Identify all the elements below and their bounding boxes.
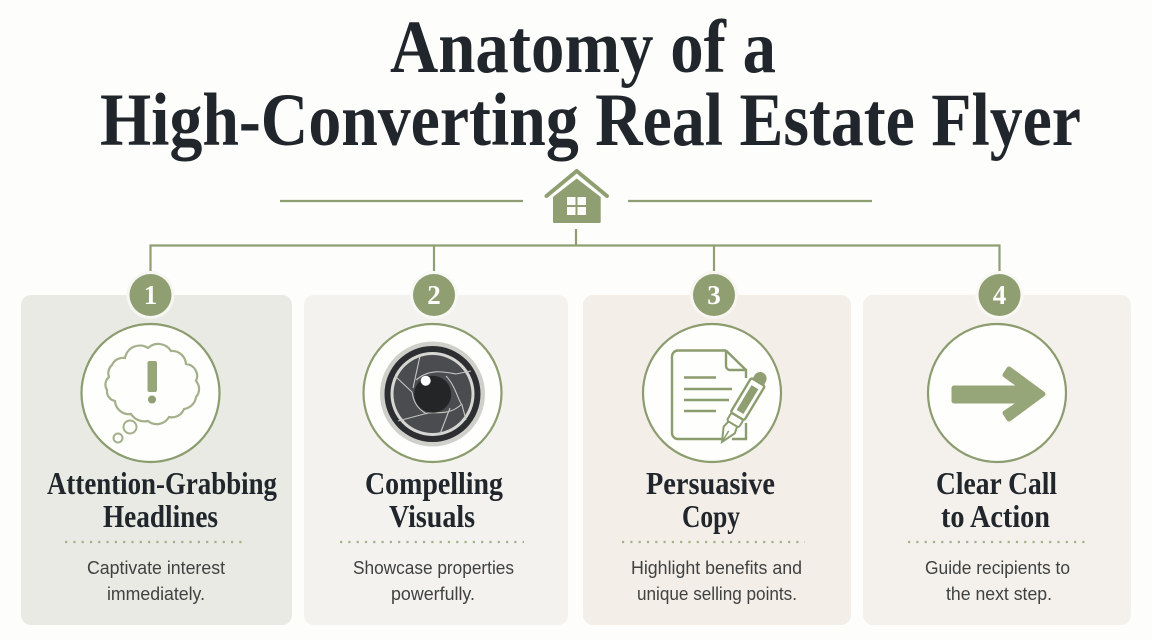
description: Captivate interest [87, 558, 225, 578]
icon: arrow [928, 324, 1066, 462]
badge: 3 [690, 271, 738, 319]
icon: house [546, 171, 607, 223]
title: Anatomy of a [390, 6, 776, 89]
icon: document and fountain pen [643, 324, 781, 462]
title divider with house icon [280, 171, 872, 223]
panel: attention-grabbing headlines [21, 271, 292, 625]
connector lines [150, 229, 1000, 275]
heading second line: Headlines [103, 498, 218, 534]
description: unique selling points. [637, 584, 797, 604]
heading second line: Copy [682, 498, 740, 534]
description [87, 558, 225, 604]
description [353, 558, 514, 604]
badge: 3: 3 [707, 280, 721, 310]
heading: Attention-Grabbing [47, 465, 277, 501]
panel: compelling visuals [304, 271, 568, 625]
heading: Compelling [365, 465, 503, 501]
panel: persuasive copy [583, 271, 851, 625]
icon: camera aperture [364, 324, 502, 462]
badge: 1 [126, 271, 174, 319]
badge: 2: 2 [427, 280, 441, 310]
description: the next step. [946, 584, 1052, 604]
heading: Clear Call [936, 465, 1057, 501]
panel: clear call to action [863, 271, 1131, 625]
badge: 1: 1 [144, 280, 157, 310]
heading second line: Visuals [389, 498, 475, 534]
description: Showcase properties [353, 558, 514, 578]
description: Guide recipients to [925, 558, 1070, 578]
description [631, 558, 802, 604]
description: powerfully. [391, 584, 475, 604]
heading: Persuasive [646, 465, 775, 501]
description: Highlight benefits and [631, 558, 802, 578]
badge: 4: 4 [993, 280, 1006, 310]
badge: 4 [976, 271, 1024, 319]
heading second line: to Action [941, 498, 1050, 534]
icon: thought bubble with exclamation mark [82, 324, 220, 462]
description [925, 558, 1070, 604]
description: immediately. [107, 584, 205, 604]
title [100, 6, 1081, 162]
badge: 2 [410, 271, 458, 319]
